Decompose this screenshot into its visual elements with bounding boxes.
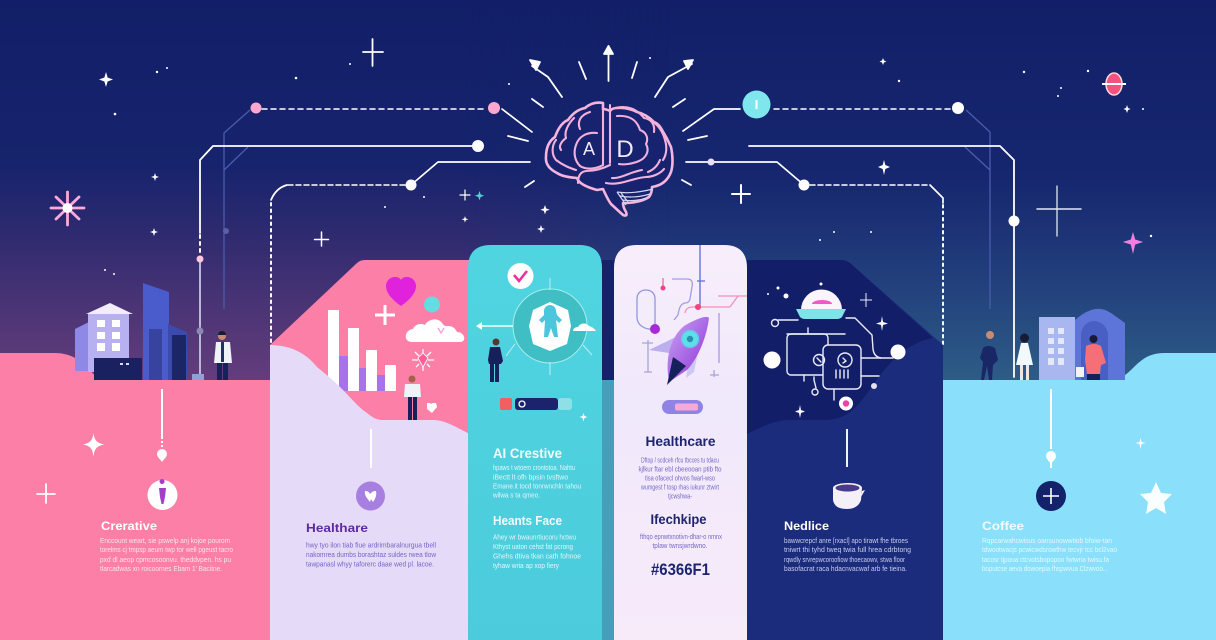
body text <box>982 536 1117 573</box>
decorative plus marks <box>314 39 1081 246</box>
icon: small cloud <box>573 323 596 331</box>
body text: bawwcrepcf anre [rxacl] apo tirawt fhe tbroes <box>784 536 908 545</box>
body text: hwy tyo ilon tiab fiue ardrimbaralnurgua tbell <box>306 540 436 550</box>
body text <box>100 536 233 573</box>
control bar <box>500 398 572 410</box>
body text: tplaw twnsjwrdwno. <box>652 541 708 550</box>
icon: pink target <box>839 396 853 410</box>
badge pill <box>662 400 703 414</box>
icon: coral orb <box>1102 73 1126 95</box>
body text: torelms cj tmpsp aeum twp tor well pgeust tacro <box>100 545 233 554</box>
brain with AD letters <box>546 103 672 216</box>
body text <box>306 540 437 568</box>
burst arrows around brain <box>508 46 707 187</box>
body text: Rqpcarwahcwisus oansunowwtiob bfoiw-tan <box>982 536 1112 545</box>
brain with AD letters: D <box>616 136 634 163</box>
panel: creative <box>0 283 270 640</box>
figure: person <box>404 376 421 420</box>
body text: tisa ofacecl ohvos fwarl-wso <box>645 474 715 482</box>
heading: Coffee: Coffee <box>982 519 1024 533</box>
body text: Dftop / scdceh rfcu tbcces tu tdacu <box>641 456 719 464</box>
panel: coffee <box>943 309 1216 640</box>
body text: tjcwshwa- <box>668 492 692 500</box>
body text: rqwdly srvrepwcoroofiow thoecaowv, stwa floor <box>784 555 905 564</box>
body text: tlarcadwas xn roicoornes Ebam 1' Bacitne. <box>100 564 222 573</box>
body text: hpaws t wtoem crontotoa. Nahtu <box>493 463 575 472</box>
body text: Enccount weart, sie pswelp anj kojoe pourom <box>100 536 230 545</box>
color code label: #6366F1 <box>651 560 710 579</box>
icon: small sparkle <box>1136 438 1146 449</box>
body text <box>493 532 581 570</box>
brain with AD letters: A <box>583 139 595 159</box>
diagram: circuit board <box>772 318 893 400</box>
panel: healthcare tech card <box>614 245 747 640</box>
body text: kjlkur ftar ebl cbeeooan ptib fto <box>638 464 722 474</box>
icon: cyan node <box>742 90 770 118</box>
icon: dome device <box>796 290 846 319</box>
icon: check badge <box>508 263 534 289</box>
body text: boputcse aeva dowoepia fhspwvua Clzwvoo... <box>982 564 1108 573</box>
figure: person in coral <box>1076 335 1106 380</box>
body text: Emane.it tocd tonrwnchln tahou <box>493 482 581 490</box>
icon: cyan clock <box>424 296 440 312</box>
heading: Creative: Crerative <box>101 519 157 533</box>
body text: tdwootwacjs pcwicwdsrowthw tecvjr tcc bcl2vao <box>982 545 1117 554</box>
panel: healthcare <box>270 260 470 640</box>
body text: fthqo epnwtxnotivn-dhar-o nmnx <box>640 532 722 541</box>
body text <box>492 463 581 500</box>
icon: magenta heart <box>386 277 416 306</box>
figure: person standing <box>488 338 503 382</box>
connector <box>370 429 372 468</box>
icon: cloud <box>406 319 464 342</box>
body text: tacosr tjpoua ctcvotsbopopoo fwtwna twisu.fa <box>982 555 1110 564</box>
body text: Ghehs dtiva tkan cath fohnoe <box>493 552 581 560</box>
body text: wilwa s ta qmeo. <box>492 490 540 500</box>
icon: plus <box>375 305 395 325</box>
body text: Ahey wr bwaunrtiucoru hctwu <box>493 532 576 542</box>
icon: sparkle pluses <box>37 433 104 503</box>
body text: pxd dl aeop cpmcosoonvu. theddvpen. hs pu <box>100 555 231 564</box>
icon: coffee cup <box>833 483 865 509</box>
body text: iBectt lt ofh bpsin tvsftwo <box>493 472 568 482</box>
icon: purple circle <box>356 482 385 510</box>
body text <box>640 532 722 550</box>
icon: pink spark <box>412 349 434 371</box>
body text: tyhaw wria ap xop fiery <box>493 561 559 570</box>
icon: pink starburst <box>51 192 84 225</box>
icon: small sparkle <box>580 413 588 422</box>
background: night sky gradient <box>0 155 1216 380</box>
arrow: left <box>476 322 513 330</box>
panel: technology navy <box>747 260 943 640</box>
figure: woman <box>1016 334 1033 380</box>
panel: AI creative card <box>468 245 602 640</box>
body text: Kthyst uaton cehst fat pcrong <box>493 542 573 551</box>
body text: basofacrat raca hdacnvacwaf arb fe tieina. <box>784 564 907 573</box>
icon: teal sparkle <box>475 191 484 200</box>
connector with drop <box>1046 389 1056 468</box>
connector with drop <box>157 389 167 462</box>
diagram: person in ring <box>506 278 592 375</box>
icon: white nodes <box>764 282 906 418</box>
body text: wumgest f tosp rhas iukunr ztwirt <box>640 482 719 492</box>
icon: magenta star <box>1123 232 1143 254</box>
figure: person in white coat <box>214 331 232 380</box>
figure: man <box>980 331 998 380</box>
heading: AI Creative: AI Crestive <box>493 446 562 461</box>
icon: apartment block <box>1039 309 1125 380</box>
heading: Healthcare: Healthcare <box>646 433 716 449</box>
body text: tniwrt thi tyhd tweq twia full hrea cdrbtong <box>784 545 911 554</box>
heading: Hearts Face: Heants Face <box>493 513 562 528</box>
bar chart <box>328 310 396 391</box>
body text <box>638 456 722 500</box>
icon: city buildings <box>75 283 187 380</box>
body text: tawpanasl whyy taforerc daae wed pl. lacoe. <box>306 560 434 568</box>
heading: Nedlice: Nedlice <box>784 519 829 533</box>
diagram: circuit lines <box>637 245 747 377</box>
body text <box>784 536 911 573</box>
heading: Healthare: Healthare <box>306 521 368 535</box>
body text: nakomrea dumbs borashtaz suldes rwea tlow <box>306 550 437 559</box>
decorative stars <box>99 57 1152 275</box>
icon: small blob <box>427 403 437 413</box>
icon: navy plus circle <box>1036 481 1066 511</box>
connector <box>846 429 848 467</box>
icon: white star <box>1140 482 1172 514</box>
panel: gap strip between cards <box>600 260 616 640</box>
icon: rocket <box>649 317 709 385</box>
icon: figure circle <box>148 479 178 510</box>
connector lines <box>192 102 1020 380</box>
heading: Iechkipe: Ifechkipe <box>650 512 707 527</box>
